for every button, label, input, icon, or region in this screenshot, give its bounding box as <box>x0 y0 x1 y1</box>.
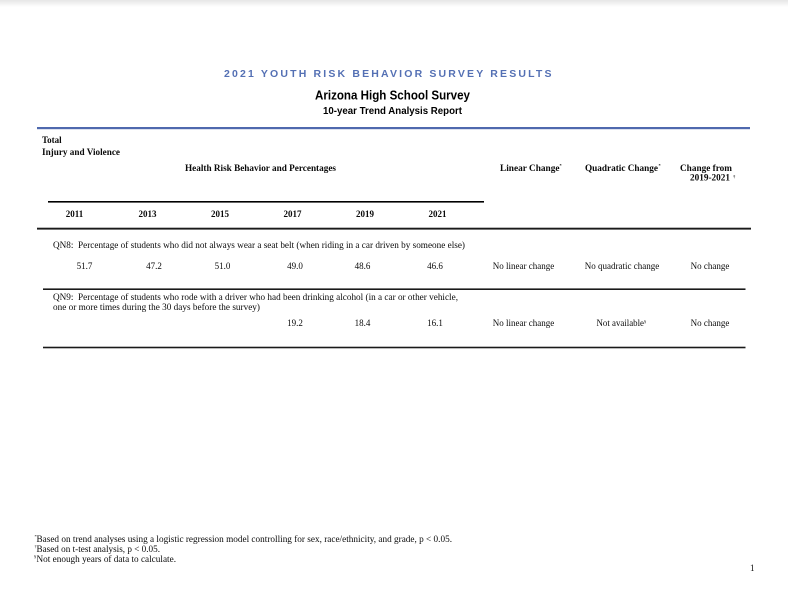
row: QN9 drinking driver: 16.1 <box>427 318 443 328</box>
year columns: 2015 <box>211 209 230 219</box>
table header: Health Risk Behavior and Percentages <box>185 163 337 173</box>
row: QN9 drinking driver: No linear change <box>493 318 554 328</box>
row: QN9 drinking driver <box>53 292 729 328</box>
table header: Change from <box>680 163 733 173</box>
row: QN8 seat belt: No linear change <box>493 261 554 271</box>
row: QN8 seat belt: QN8: Percentage of students who did not always wear a seat belt (when riding in a car driven by someone else) <box>53 240 465 250</box>
heading: Arizona High School Survey: Arizona High School Survey <box>315 88 470 102</box>
subheading: report type: 10-year Trend Analysis Report <box>323 106 463 117</box>
row: QN8 seat belt: 51.0 <box>215 261 231 271</box>
row: QN9 drinking driver: one or more times during the 30 days before the survey) <box>53 302 260 312</box>
category labels: Total <box>42 135 62 145</box>
footnotes: * <box>34 534 38 539</box>
year columns: 2021 <box>428 209 447 219</box>
category labels: Injury and Violence <box>42 147 120 157</box>
category labels <box>42 135 120 157</box>
footnotes: † <box>34 544 38 549</box>
row: QN9 drinking driver: 18.4 <box>355 318 371 328</box>
row: QN9 drinking driver: Not available <box>596 318 644 328</box>
table header: Quadratic Change <box>585 163 658 173</box>
row: QN9 drinking driver: QN9: Percentage of students who rode with a driver who had been drinking alcohol (in a car or other vehicle, <box>53 292 458 302</box>
row: QN8 seat belt: No change <box>691 261 729 271</box>
footnotes: Based on trend analyses using a logistic regression model controlling for sex, race/ethnicity, and grade, p < 0.05. <box>36 534 452 544</box>
footnotes: § <box>34 554 36 559</box>
table header: Linear Change <box>500 163 560 173</box>
footnotes: Based on t-test analysis, p < 0.05. <box>36 544 160 554</box>
year columns <box>48 201 484 219</box>
table header: 2019-2021 <box>690 172 731 182</box>
row: QN8 seat belt: 49.0 <box>287 261 303 271</box>
row: QN8 seat belt: No quadratic change <box>585 261 659 271</box>
row: QN8 seat belt: 46.6 <box>427 261 443 271</box>
year columns: 2013 <box>138 209 157 219</box>
table header <box>185 163 736 182</box>
table header: † <box>733 174 736 179</box>
year columns: 2011 <box>66 209 84 219</box>
footnotes <box>34 534 452 564</box>
row: QN9 drinking driver: 19.2 <box>287 318 303 328</box>
row: QN8 seat belt: 47.2 <box>146 261 162 271</box>
row: QN8 seat belt: 48.6 <box>355 261 371 271</box>
table header: * <box>658 163 662 168</box>
row: QN8 seat belt <box>53 240 729 271</box>
page number: 1 <box>750 563 754 573</box>
row: QN9 drinking driver: No change <box>691 318 729 328</box>
title: survey results: 2021 YOUTH RISK BEHAVIOR SURVEY RESULTS <box>224 68 552 80</box>
row: QN8 seat belt: 51.7 <box>77 261 93 271</box>
year columns: 2017 <box>284 209 302 219</box>
table header: * <box>560 163 562 168</box>
blue header rule <box>37 127 750 129</box>
row: QN9 drinking driver: § <box>644 319 646 324</box>
year columns: 2019 <box>356 209 374 219</box>
footnotes: Not enough years of data to calculate. <box>36 554 176 564</box>
